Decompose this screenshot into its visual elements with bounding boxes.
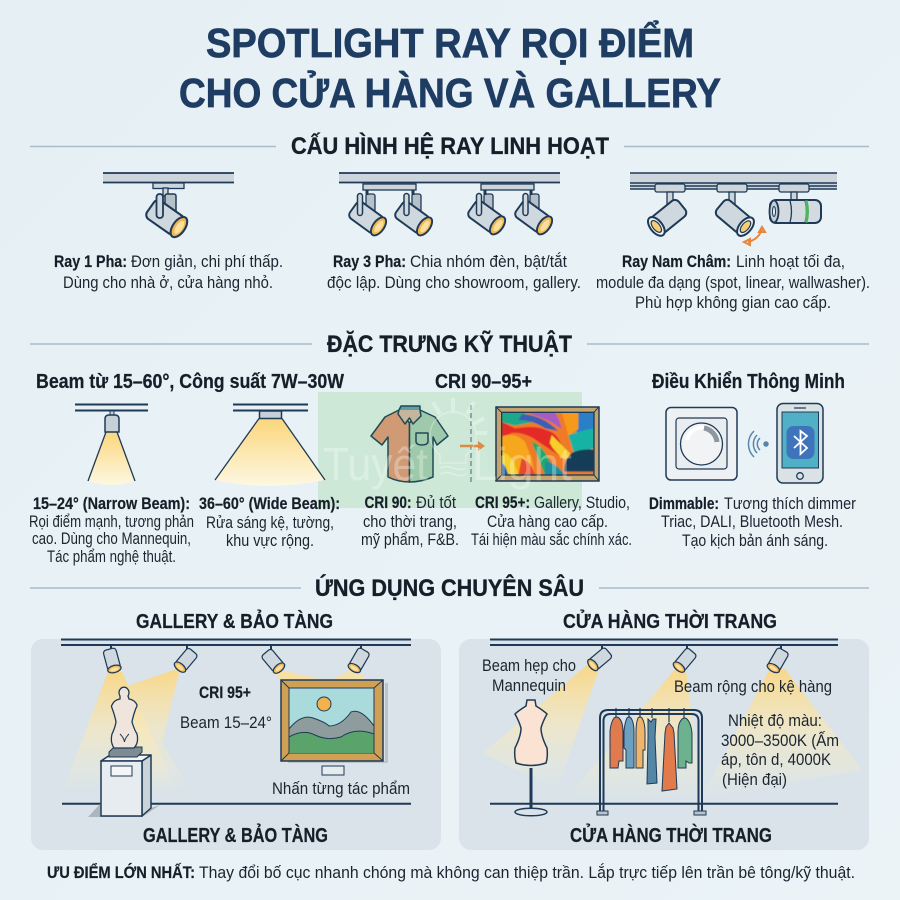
clothing rack [597, 708, 706, 815]
text: narrow beam: 15–24° (Narrow Beam): [33, 495, 190, 513]
footer: biggest advantage: ƯU ĐIỂM LỚN NHẤT: [47, 863, 195, 882]
light beams: store [483, 665, 862, 800]
icon: three phase rail with four spotlights [339, 173, 560, 238]
subheading: fashion store: CỬA HÀNG THỜI TRANG [563, 609, 777, 633]
heading: rail configurations: CẤU HÌNH HỆ RAY LINH HOẠT [291, 132, 609, 160]
caption: store: CỬA HÀNG THỜI TRANG [570, 823, 772, 847]
text: dimmable: Tương thích dimmer [724, 495, 856, 513]
text: narrow beam: cao. Dùng cho Mannequin, [32, 530, 191, 548]
icon: wide beam [215, 404, 325, 486]
text: CRI 90: CRI 90: [364, 494, 412, 512]
spotlights: gallery [103, 647, 370, 675]
text: CRI 90: Đủ tốt [416, 494, 456, 512]
icon: colourful painting [496, 407, 599, 481]
subheading: smart control: Điều Khiển Thông Minh [652, 371, 845, 393]
text: CRI 95+: Gallery, Studio, [534, 494, 630, 512]
spotlights: store [586, 647, 789, 675]
arrow: rotation indicator [744, 227, 765, 245]
watermark logo [323, 398, 572, 490]
light beams: gallery [62, 668, 372, 792]
divider and arrow: CRI comparison [460, 405, 485, 483]
text: CRI 95+ [471, 494, 632, 549]
text: CRI 95+: Tái hiện màu sắc chính xác. [471, 530, 632, 549]
panel: CRI [361, 371, 632, 549]
icon: single phase rail spotlight [103, 173, 234, 240]
text: single phase description: Dùng cho nhà ở, cửa hàng nhỏ. [63, 273, 273, 292]
text: colour temperature [721, 712, 839, 789]
text: single phase description: Ray 1 Pha: [54, 252, 127, 271]
text: three phase description [327, 252, 581, 292]
text: narrow beam [29, 495, 194, 566]
text: three phase description: Chia nhóm đèn, bật/tắt [410, 252, 567, 271]
panel: beam and power [29, 371, 344, 566]
pedestal with statue [88, 687, 160, 817]
text: single phase description [54, 252, 283, 292]
text: narrow beam for mannequin: Mannequin [492, 677, 566, 695]
text: narrow beam for mannequin [482, 657, 576, 695]
text: colour temperature: 3000–3500K (Ấm [721, 731, 839, 750]
icon: wireless signal [748, 431, 768, 457]
watermark logo: Tuyết [323, 438, 428, 490]
caption: gallery: GALLERY & BẢO TÀNG [143, 824, 328, 847]
text: CRI 95+ in gallery: CRI 95+ [199, 684, 251, 702]
text: accent each artwork: Nhấn từng tác phẩm [272, 780, 410, 798]
text: colour temperature: Nhiệt độ màu: [728, 712, 822, 730]
text: dimmable: Triac, DALI, Bluetooth Mesh. [661, 513, 843, 531]
icon: smartphone with bluetooth [777, 404, 823, 483]
text: dimmable [649, 495, 856, 550]
heading: technical features: ĐẶC TRƯNG KỸ THUẬT [327, 330, 572, 358]
panel: smart control [649, 371, 856, 550]
panel: gallery and museum [31, 639, 441, 850]
text: colour temperature: áp, tôn d, 4000K [721, 751, 831, 769]
icon: narrow beam [75, 404, 148, 485]
text: magnetic description [596, 252, 870, 312]
panel: magnetic rail [596, 173, 870, 312]
icon: magnetic rail with modules [630, 173, 837, 239]
painting: landscape [281, 680, 388, 775]
panel: three phase rail [327, 173, 581, 292]
text: wide beam: 36–60° (Wide Beam): [199, 495, 340, 513]
text: CRI 90: mỹ phẩm, F&B. [361, 531, 459, 549]
text: colour temperature: (Hiện đại) [722, 771, 787, 789]
text: beam angle: Beam 15–24° [180, 714, 272, 732]
subheading: gallery: GALLERY & BẢO TÀNG [136, 610, 333, 633]
text: CRI 90: cho thời trang, [363, 513, 457, 531]
footer: biggest advantage: Thay đổi bố cục nhanh chóng mà không can thiệp trần. Lắp trực tiếp lên trần bê tông/kỹ thuật. [199, 863, 855, 882]
watermark panel [318, 392, 582, 508]
text: magnetic description: Ray Nam Châm: [622, 252, 731, 271]
panel: fashion store [459, 639, 869, 850]
text: magnetic description: Phù hợp không gian cao cấp. [635, 293, 831, 312]
subheading: CRI: CRI 90–95+ [435, 371, 532, 393]
mannequin [515, 700, 547, 816]
text: single phase description: Đơn giản, chi phí thấp. [131, 252, 283, 271]
title [179, 19, 721, 116]
text: magnetic description: Linh hoạt tối đa, [736, 252, 845, 271]
icon: shirt [371, 406, 448, 482]
watermark logo: Light [472, 438, 572, 490]
text: narrow beam for mannequin: Beam hẹp cho [482, 657, 576, 675]
text: narrow beam: Rọi điểm mạnh, tương phản [29, 513, 194, 531]
text: CRI 90 [361, 494, 459, 549]
heading: in-depth applications: ỨNG DỤNG CHUYÊN SÂU [315, 574, 584, 602]
text: CRI 95+: Cửa hàng cao cấp. [487, 513, 608, 531]
text: wide beam: khu vực rộng. [226, 532, 314, 550]
text: wide beam for shelves: Beam rộng cho kệ hàng [674, 678, 832, 696]
text: wide beam [199, 495, 340, 550]
ceiling rail and floor: store [490, 640, 838, 804]
icon: dimmer switch [666, 408, 737, 480]
title: CHO CỬA HÀNG VÀ GALLERY [179, 70, 721, 116]
text: wide beam: Rửa sáng kệ, tường, [206, 514, 334, 532]
title: SPOTLIGHT RAY RỌI ĐIỂM [206, 19, 694, 66]
text: narrow beam: Tác phẩm nghệ thuật. [47, 548, 176, 566]
panel: single phase rail [54, 173, 283, 292]
text: three phase description: Ray 3 Pha: [333, 252, 406, 271]
text: dimmable: Dimmable: [649, 495, 719, 513]
subheading: beam and power: Beam từ 15–60°, Công suất 7W–30W [36, 371, 344, 393]
text: three phase description: độc lập. Dùng cho showroom, gallery. [327, 273, 581, 292]
ceiling rail and floor: gallery [61, 640, 411, 804]
text: CRI 95+: CRI 95+: [475, 494, 530, 512]
text: dimmable: Tạo kịch bản ánh sáng. [682, 532, 828, 550]
